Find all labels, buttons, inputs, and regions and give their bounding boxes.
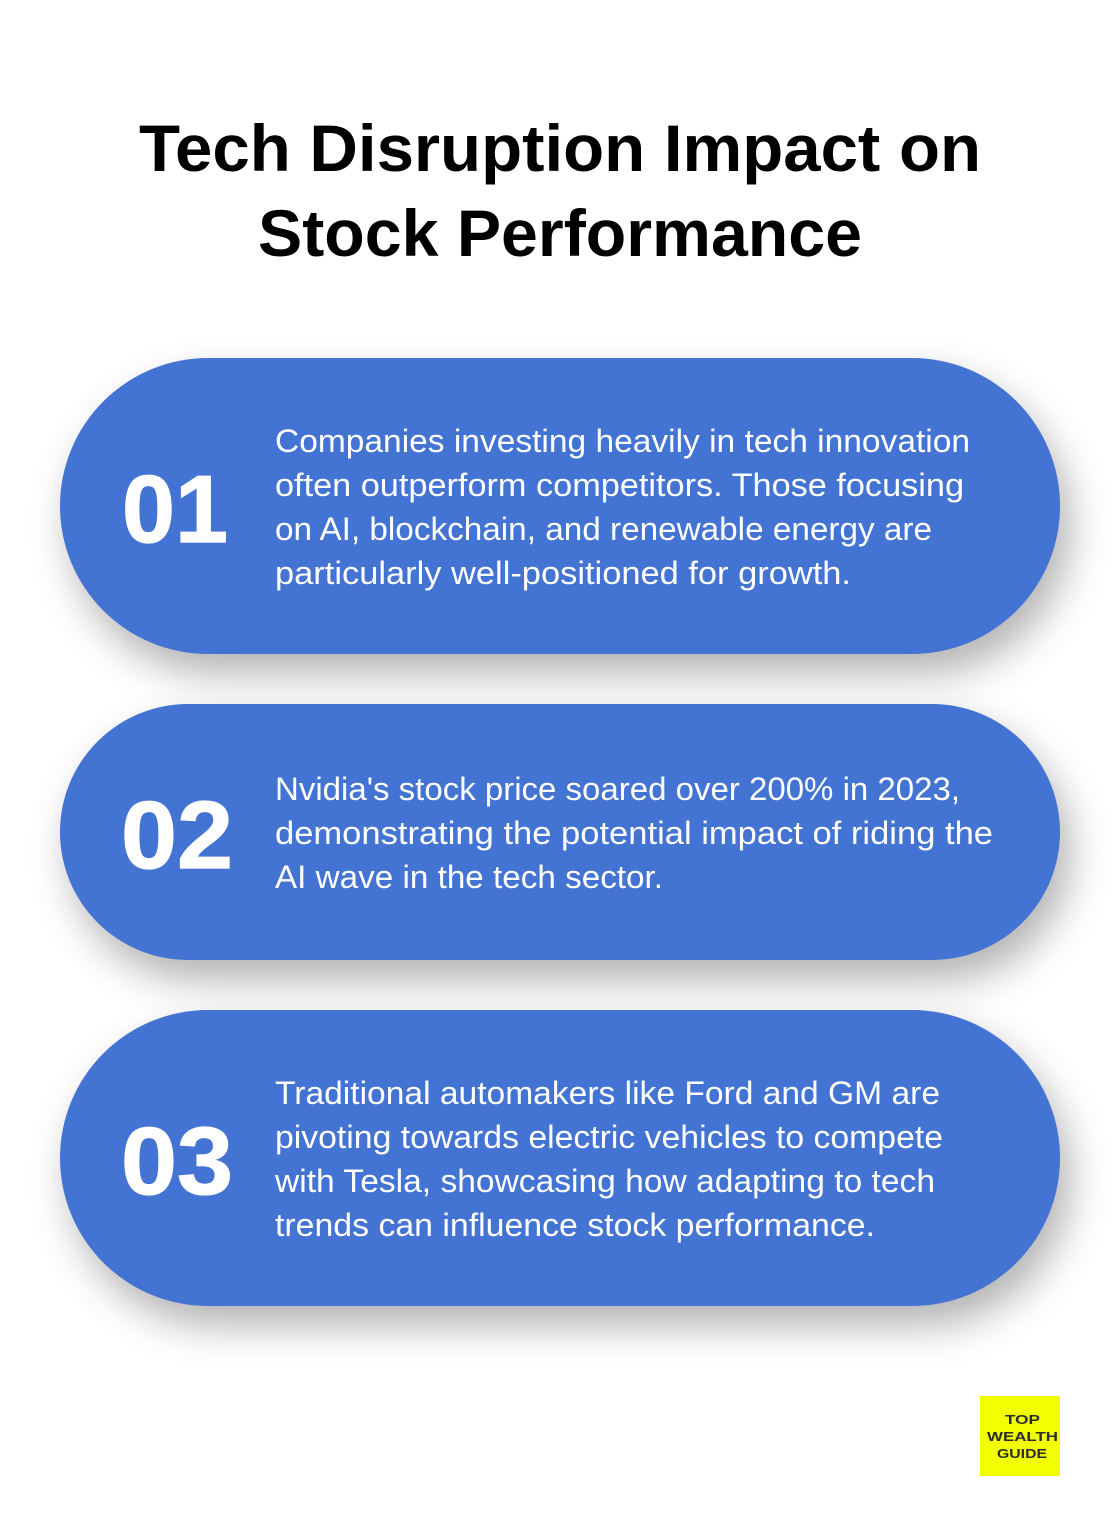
text block: card 02: Nvidia's stock price soared over 200% in 2023,	[275, 771, 960, 807]
number 01: 01	[122, 456, 228, 563]
logo: Top Wealth Guide	[980, 1396, 1060, 1476]
text block: card 02: demonstrating the potential impact of riding the	[275, 815, 993, 851]
text block: card 03: with Tesla, showcasing how adapting to tech	[274, 1163, 935, 1199]
title: Stock Performance	[258, 196, 862, 270]
text block: card 02	[275, 771, 993, 895]
text block: card 03: Traditional automakers like Ford and GM are	[275, 1075, 940, 1111]
text block: card 01: Companies investing heavily in tech innovation	[275, 423, 970, 459]
panel: card 02	[60, 704, 1060, 960]
title: Tech Disruption Impact on	[139, 111, 981, 185]
text block: card 03	[274, 1075, 943, 1243]
panel: card 03	[60, 1010, 1060, 1306]
title	[139, 111, 981, 270]
text block: card 01: often outperform competitors. Those focusing	[275, 467, 964, 503]
text block: card 01: on AI, blockchain, and renewable energy are	[275, 511, 932, 547]
text block: card 02: AI wave in the tech sector.	[275, 859, 663, 895]
number 02: 02	[121, 782, 233, 889]
logo: Top Wealth Guide: WEALTH	[987, 1429, 1058, 1444]
text block: card 01	[275, 423, 970, 591]
number 03: 03	[121, 1108, 233, 1215]
text block: card 03: pivoting towards electric vehicles to compete	[275, 1119, 943, 1155]
logo: Top Wealth Guide: GUIDE	[997, 1446, 1047, 1461]
logo: Top Wealth Guide: TOP	[1005, 1412, 1040, 1427]
text block: card 01: particularly well-positioned for growth.	[275, 555, 851, 591]
panel: card 01	[60, 358, 1060, 654]
text block: card 03: trends can influence stock performance.	[275, 1207, 875, 1243]
